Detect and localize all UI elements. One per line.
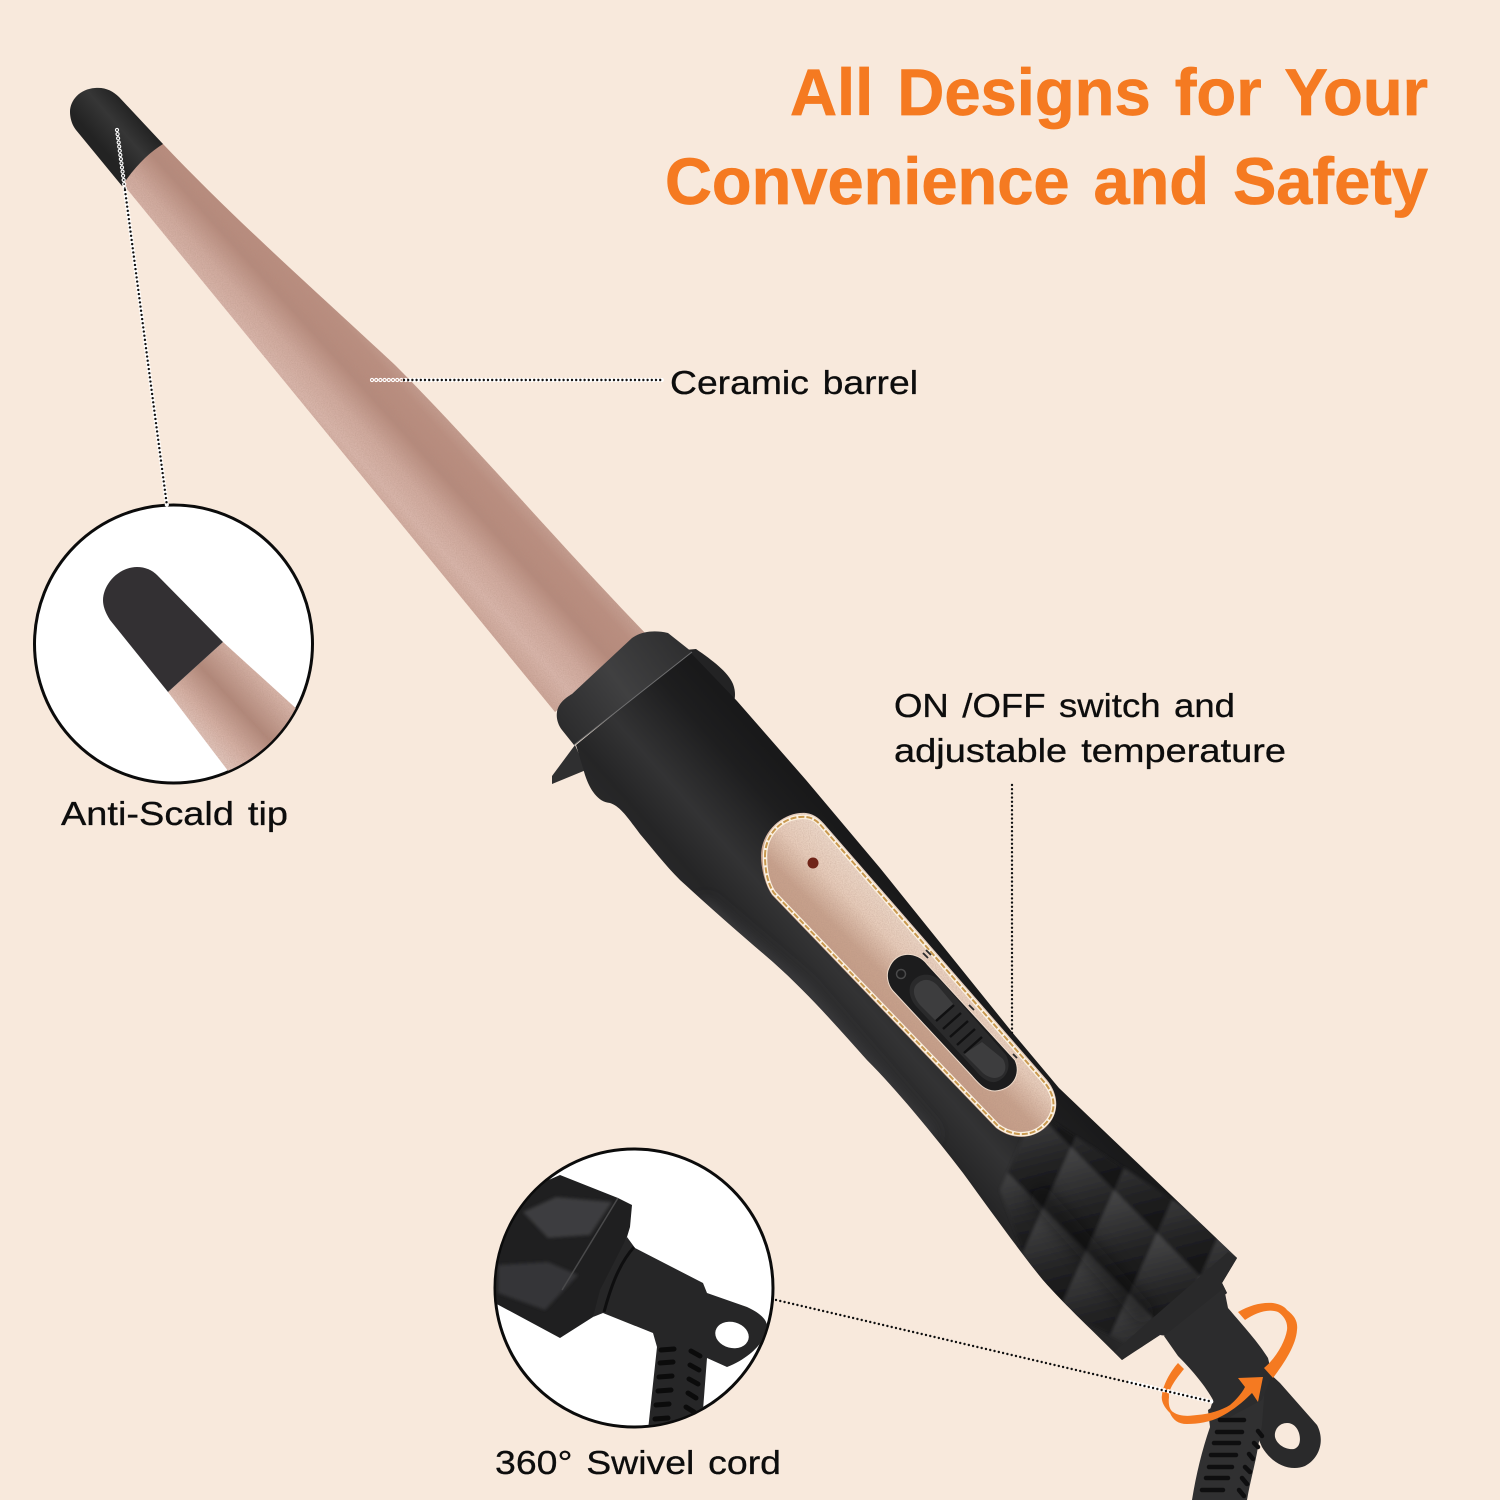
hanging loop — [1250, 1370, 1321, 1468]
title: Convenience and Safety — [665, 144, 1428, 218]
title: All Designs for Your — [790, 55, 1428, 129]
lower collar tab — [552, 745, 586, 784]
inset barrel — [168, 642, 300, 780]
arrow lower arc — [1162, 1363, 1263, 1424]
curling iron — [70, 88, 1321, 1500]
leader line — [1011, 785, 1013, 1036]
slider front grip — [914, 980, 954, 1021]
callout: anti-scald tip — [61, 130, 288, 832]
collar — [557, 631, 692, 745]
label — [894, 687, 1286, 769]
anti-scald tip — [70, 88, 163, 186]
label: adjustable temperature — [894, 732, 1286, 769]
inset groove — [604, 1247, 634, 1312]
leader line — [117, 130, 167, 506]
arrow upper arc — [1238, 1303, 1297, 1378]
switch slot — [887, 954, 1017, 1091]
handle lower sheen — [700, 905, 930, 1140]
inset handle end — [496, 1175, 632, 1338]
cord ribs — [1202, 1420, 1262, 1496]
indicator light — [808, 858, 818, 868]
inset neck — [593, 1237, 767, 1430]
power symbol — [896, 970, 906, 978]
inset cap ridge — [562, 1198, 618, 1290]
inset cord ribs — [655, 1349, 700, 1419]
diamond grip — [1001, 1124, 1237, 1350]
slider rear grip — [964, 1042, 1005, 1078]
handle body — [576, 652, 1237, 1360]
inset tip — [103, 567, 223, 692]
slider ridges — [936, 1005, 982, 1053]
collar seam — [574, 652, 692, 745]
slider — [910, 975, 1009, 1082]
inset loop hole — [715, 1322, 749, 1348]
callout: swivel cord — [495, 1300, 1213, 1481]
label: Ceramic barrel — [670, 364, 918, 401]
inset facets — [523, 1197, 612, 1238]
cord — [1192, 1370, 1266, 1500]
label: 360° Swivel cord — [495, 1444, 781, 1481]
swivel neck — [1164, 1288, 1272, 1418]
barrel — [120, 138, 648, 712]
grip shade — [1035, 1190, 1150, 1320]
grip end cap — [1114, 1252, 1237, 1360]
leader line — [776, 1300, 1213, 1402]
callout: on/off switch — [894, 687, 1286, 1036]
swivel rotation arrow — [1162, 1303, 1297, 1424]
label: ON /OFF switch and — [894, 687, 1235, 724]
switch panel — [761, 813, 1056, 1137]
leader line — [372, 378, 662, 382]
label: Anti-Scald tip — [61, 795, 288, 832]
rear collar tab — [685, 649, 735, 702]
title — [665, 55, 1428, 218]
inset circle: swivel — [480, 1149, 773, 1430]
inset circle: tip — [34, 505, 312, 783]
temperature marks — [923, 950, 1017, 1058]
